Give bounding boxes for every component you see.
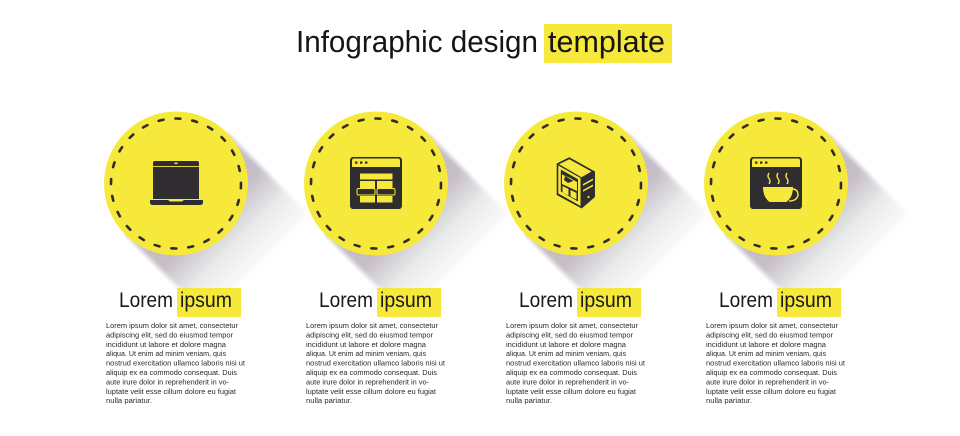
- dashed ring: [711, 118, 841, 248]
- text block: aliquip ex ea commodo consequat. Duis: [306, 368, 437, 377]
- text block: adipiscing elit, sed do eiusmod tempor: [306, 330, 433, 339]
- heading: [519, 288, 641, 317]
- text block: aliqua. Ut enim ad minim veniam, quis: [106, 349, 226, 358]
- text block: incididunt ut labore et dolore magna: [106, 340, 227, 349]
- text block: nostrud exercitation ullamco laboris nisi ut: [706, 359, 846, 368]
- text block: adipiscing elit, sed do eiusmod tempor: [106, 330, 233, 339]
- long shadow: [525, 133, 708, 315]
- text block: nostrud exercitation ullamco laboris nisi ut: [506, 359, 646, 368]
- text block: [106, 321, 246, 405]
- text block: luptate velit esse cillum dolore eu fugiat: [706, 387, 837, 396]
- text block: adipiscing elit, sed do eiusmod tempor: [706, 330, 833, 339]
- text block: [506, 321, 646, 405]
- text block: nulla pariatur.: [306, 396, 352, 405]
- heading: Lorem: [319, 289, 373, 312]
- text block: aliquip ex ea commodo consequat. Duis: [506, 368, 637, 377]
- long shadow: [125, 133, 308, 315]
- text block: aliquip ex ea commodo consequat. Duis: [106, 368, 237, 377]
- panel: laptop: [104, 112, 308, 405]
- long shadow: [325, 133, 508, 315]
- dashed ring: [511, 118, 641, 248]
- icon: browser window with blocks: [350, 157, 402, 209]
- heading: [719, 288, 841, 317]
- text block: luptate velit esse cillum dolore eu fugiat: [306, 387, 437, 396]
- text block: [706, 321, 846, 405]
- icon: browser window with coffee cup: [750, 157, 802, 209]
- title: Infographic design: [296, 24, 538, 59]
- text block: aliqua. Ut enim ad minim veniam, quis: [506, 349, 626, 358]
- text block: Lorem ipsum dolor sit amet, consectetur: [506, 321, 638, 330]
- long shadow: [725, 133, 908, 315]
- heading: Lorem: [519, 289, 573, 312]
- text block: aliquip ex ea commodo consequat. Duis: [706, 368, 837, 377]
- yellow circle: [304, 112, 448, 256]
- text block: luptate velit esse cillum dolore eu fugiat: [106, 387, 237, 396]
- text block: nulla pariatur.: [106, 396, 152, 405]
- yellow circle: [104, 112, 248, 256]
- title: [296, 24, 672, 63]
- dashed ring: [311, 118, 441, 248]
- heading: [319, 288, 441, 317]
- icon: computer case: [557, 157, 595, 208]
- text block: aliqua. Ut enim ad minim veniam, quis: [706, 349, 826, 358]
- text block: aute irure dolor in reprehenderit in vo-: [306, 377, 429, 386]
- panel: computer case: [504, 112, 708, 405]
- yellow circle: [704, 112, 848, 256]
- text block: nulla pariatur.: [706, 396, 752, 405]
- panel: browser with coffee cup: [704, 112, 908, 405]
- text block: luptate velit esse cillum dolore eu fugiat: [506, 387, 637, 396]
- heading: Lorem: [719, 289, 773, 312]
- text block: nostrud exercitation ullamco laboris nisi ut: [106, 359, 246, 368]
- heading: Lorem: [119, 289, 173, 312]
- text block: adipiscing elit, sed do eiusmod tempor: [506, 330, 633, 339]
- title: template: [548, 24, 665, 59]
- text block: Lorem ipsum dolor sit amet, consectetur: [106, 321, 238, 330]
- text block: [306, 321, 446, 405]
- heading: ipsum: [780, 289, 832, 312]
- text block: Lorem ipsum dolor sit amet, consectetur: [706, 321, 838, 330]
- text block: Lorem ipsum dolor sit amet, consectetur: [306, 321, 438, 330]
- text block: aute irure dolor in reprehenderit in vo-: [506, 377, 629, 386]
- text block: aute irure dolor in reprehenderit in vo-: [106, 377, 229, 386]
- heading: [119, 288, 241, 317]
- text block: aute irure dolor in reprehenderit in vo-: [706, 377, 829, 386]
- text block: incididunt ut labore et dolore magna: [506, 340, 627, 349]
- text block: incididunt ut labore et dolore magna: [706, 340, 827, 349]
- heading: ipsum: [580, 289, 632, 312]
- heading: ipsum: [180, 289, 232, 312]
- text block: incididunt ut labore et dolore magna: [306, 340, 427, 349]
- text block: nulla pariatur.: [506, 396, 552, 405]
- text block: nostrud exercitation ullamco laboris nisi ut: [306, 359, 446, 368]
- icon: laptop: [150, 161, 203, 205]
- heading: ipsum: [380, 289, 432, 312]
- panel: browser with blocks: [304, 112, 508, 405]
- text block: aliqua. Ut enim ad minim veniam, quis: [306, 349, 426, 358]
- yellow circle: [504, 112, 648, 256]
- dashed ring: [111, 118, 241, 248]
